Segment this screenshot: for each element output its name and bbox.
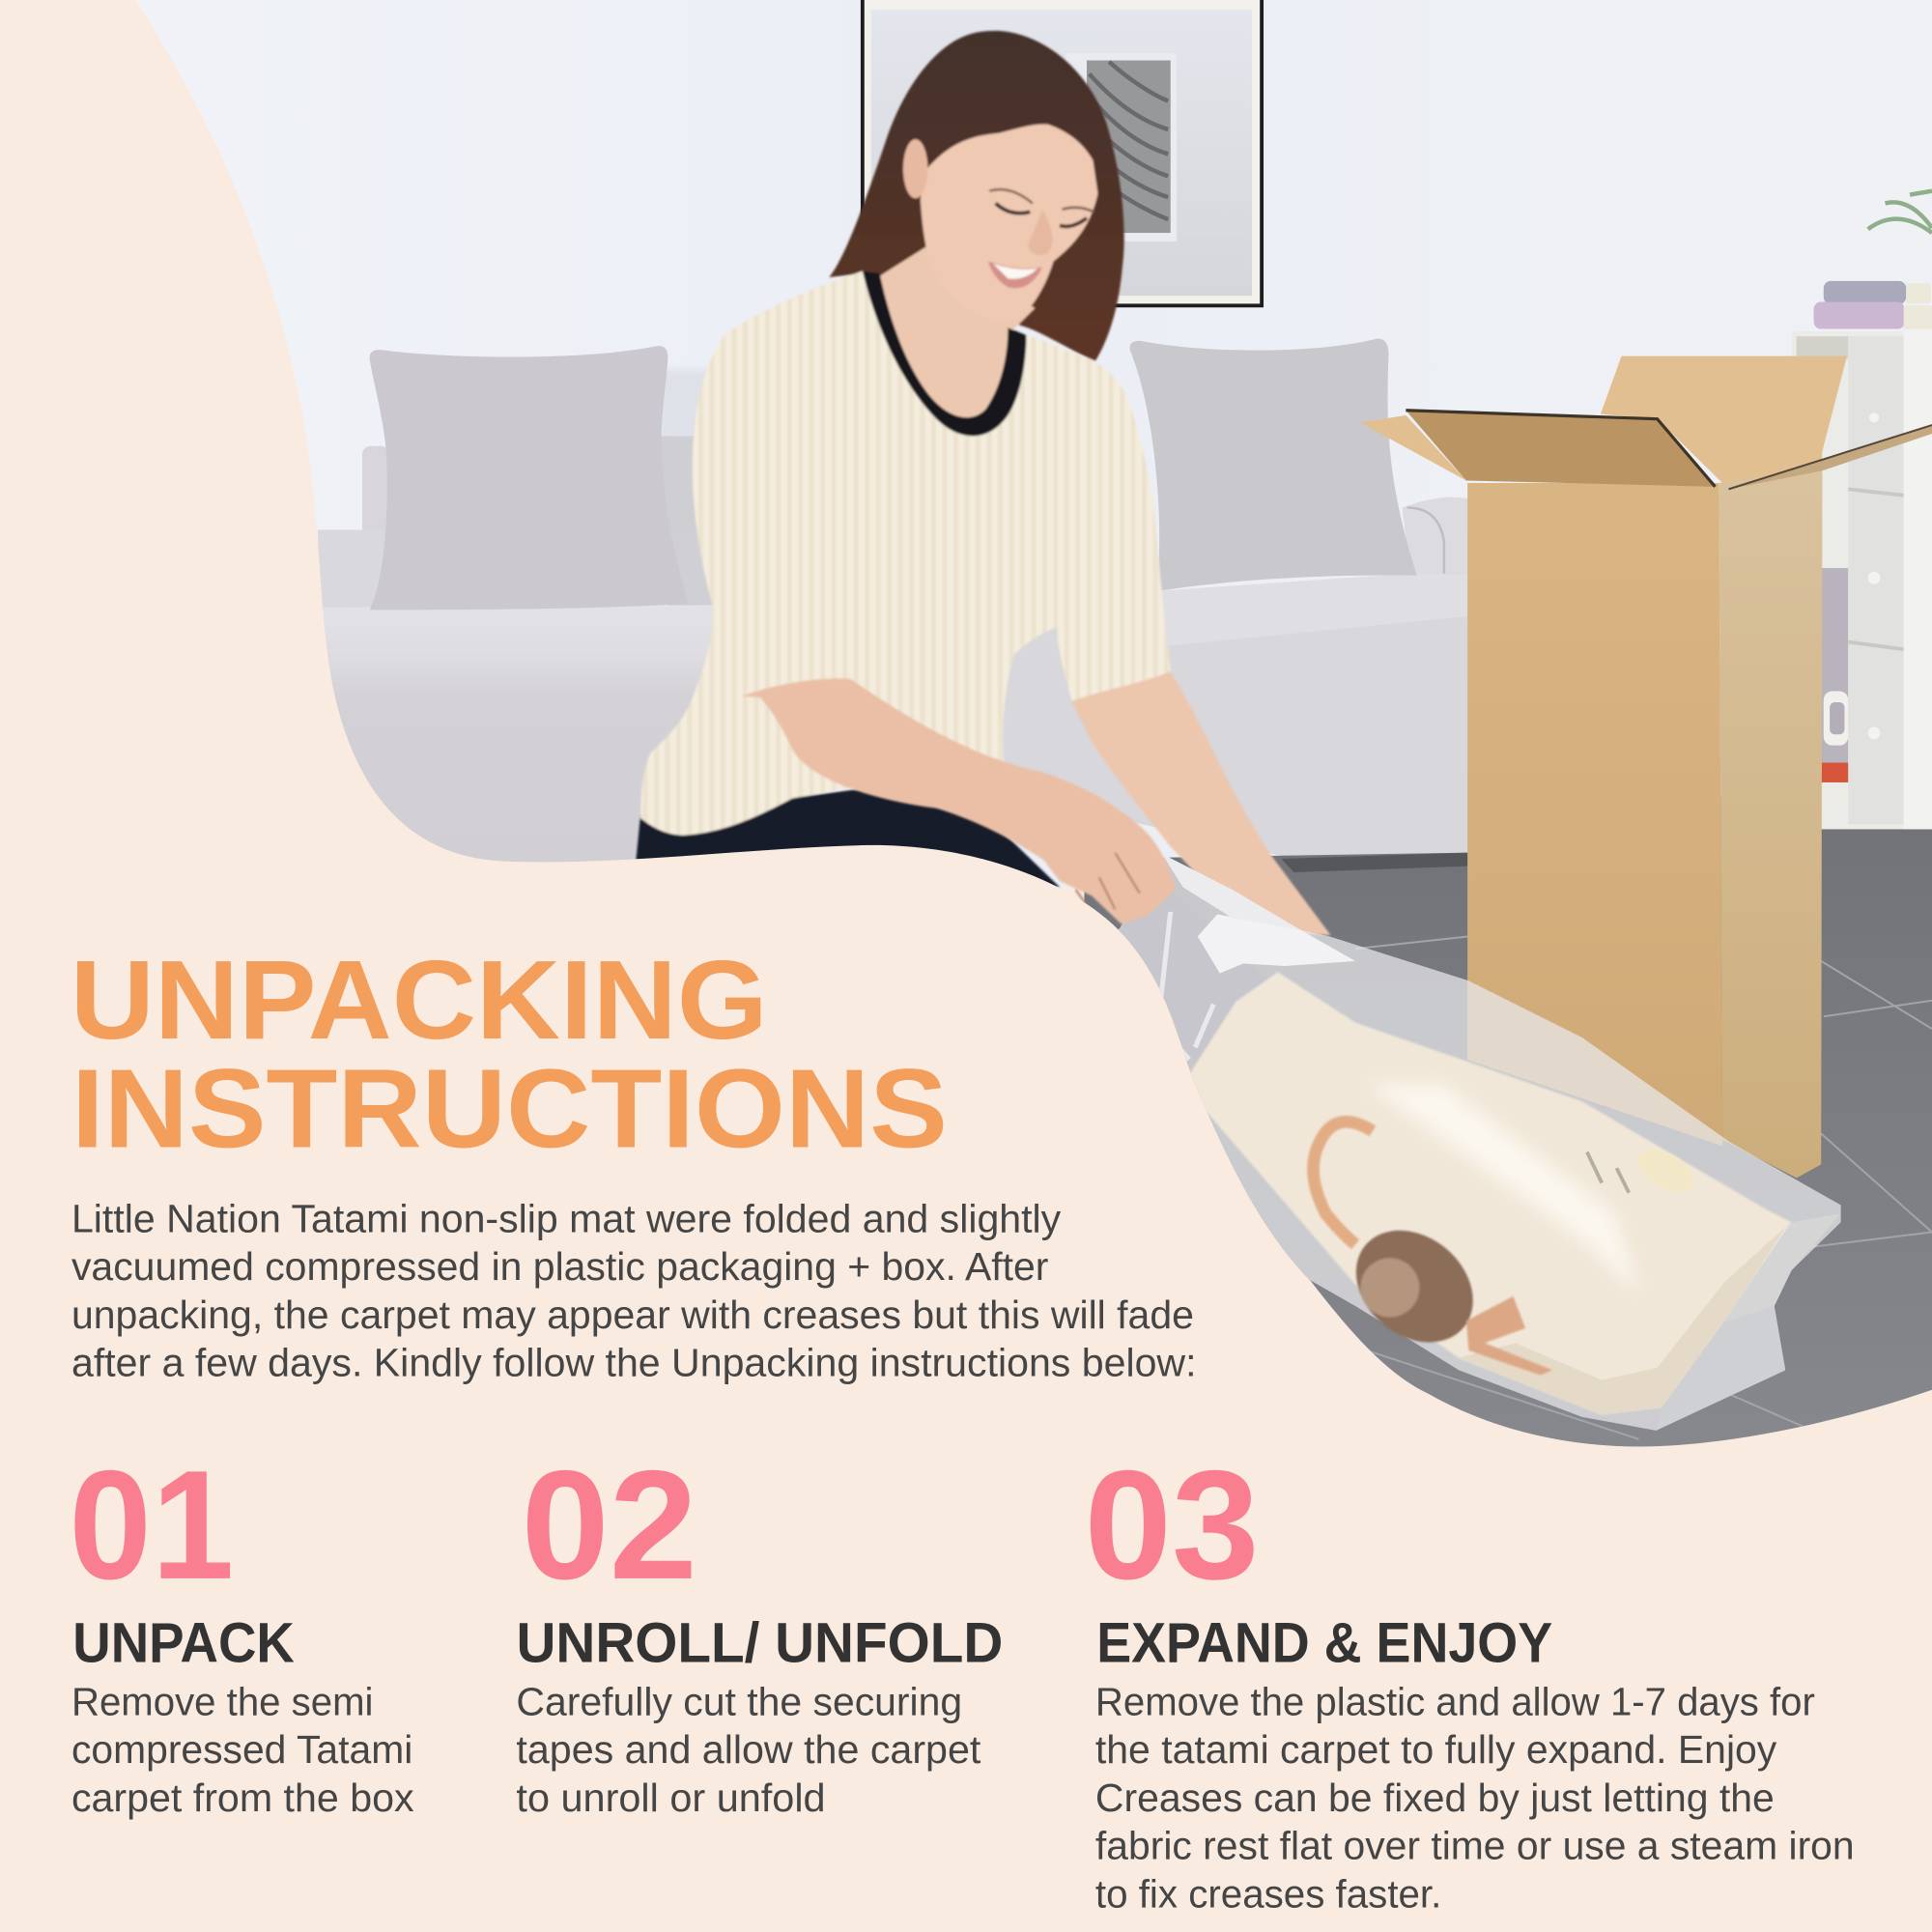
floor [1084, 795, 1932, 1479]
mat plastic glare [1379, 1082, 1634, 1281]
shelf cabinet with books and plant [1792, 191, 1932, 829]
ear [903, 139, 927, 198]
trousers [636, 788, 1060, 887]
framed picture [863, 0, 1262, 305]
wall [0, 0, 1932, 887]
sofa [318, 370, 1468, 868]
cardboard box [1360, 356, 1932, 1178]
monkey print [1314, 1122, 1552, 1375]
step 3 number: 03 [1084, 1439, 1260, 1612]
right forearm and hand [1072, 671, 1331, 935]
print marks [1587, 1152, 1629, 1193]
step 2 text: tapes and allow the carpet [516, 1727, 981, 1772]
plastic bag with rolled tatami mat [1109, 854, 1841, 1431]
step 2 number: 02 [522, 1439, 697, 1612]
step 3 text: Creases can be fixed by just letting the [1095, 1776, 1775, 1820]
step 3 text: to fix creases faster. [1095, 1871, 1441, 1916]
step 1 number: 01 [69, 1439, 234, 1612]
intro paragraph: Little Nation Tatami non-slip mat were folded and slightly [71, 1197, 1062, 1241]
intro paragraph: after a few days. Kindly follow the Unpacking instructions below: [71, 1341, 1197, 1385]
step 2 text: to unroll or unfold [516, 1776, 826, 1820]
intro paragraph [71, 1197, 1197, 1385]
woman [636, 31, 1331, 935]
left forearm and hand gripping the bag [742, 679, 1176, 924]
step 3 text: the tatami carpet to fully expand. Enjoy [1095, 1727, 1777, 1772]
eyes, nose and mouth [988, 189, 1094, 288]
title: UNPACKING [71, 937, 768, 1063]
intro paragraph: vacuumed compressed in plastic packaging + box. After [71, 1244, 1048, 1289]
sweater sleeve right [1055, 359, 1171, 701]
title [71, 937, 948, 1171]
step 2 text: Carefully cut the securing [516, 1680, 962, 1724]
step 2 text [516, 1680, 981, 1820]
step 2 [516, 1439, 1003, 1820]
chest skin and neck [880, 246, 1035, 420]
black collar [863, 271, 1026, 436]
sofa cushion right [1130, 339, 1417, 591]
step 2 heading: UNROLL/ UNFOLD [516, 1612, 1003, 1675]
step 3 text: fabric rest flat over time or use a steam iron [1095, 1824, 1855, 1868]
intro paragraph: unpacking, the carpet may appear with creases but this will fade [71, 1293, 1194, 1337]
photo: woman unpacking a rolled mat in a living room [0, 0, 1932, 1479]
mat end band [1459, 1226, 1786, 1414]
sweater torso [640, 271, 1092, 836]
step 3 text [1095, 1680, 1855, 1916]
hair back [829, 31, 1124, 361]
step 3 [1084, 1439, 1855, 1916]
step 1 text: carpet from the box [71, 1776, 414, 1820]
bag outer translucent [1115, 854, 1841, 1431]
sofa cushion left [370, 346, 689, 610]
bag streaks [1159, 912, 1215, 1061]
rolled mat [1182, 972, 1792, 1414]
step 1 heading: UNPACK [72, 1612, 295, 1675]
bag white wad [1198, 914, 1355, 974]
step 3 heading: EXPAND & ENJOY [1096, 1612, 1552, 1675]
bag corner shading [1656, 1306, 1785, 1431]
title: INSTRUCTIONS [71, 1045, 948, 1171]
step 1 [69, 1439, 414, 1820]
bag neck grey shadow [1119, 927, 1121, 930]
step 1 text: compressed Tatami [71, 1727, 412, 1772]
face [921, 125, 1097, 322]
step 1 text: Remove the semi [71, 1680, 373, 1724]
step 1 text [71, 1680, 414, 1820]
step 3 text: Remove the plastic and allow 1-7 days for [1095, 1680, 1815, 1724]
